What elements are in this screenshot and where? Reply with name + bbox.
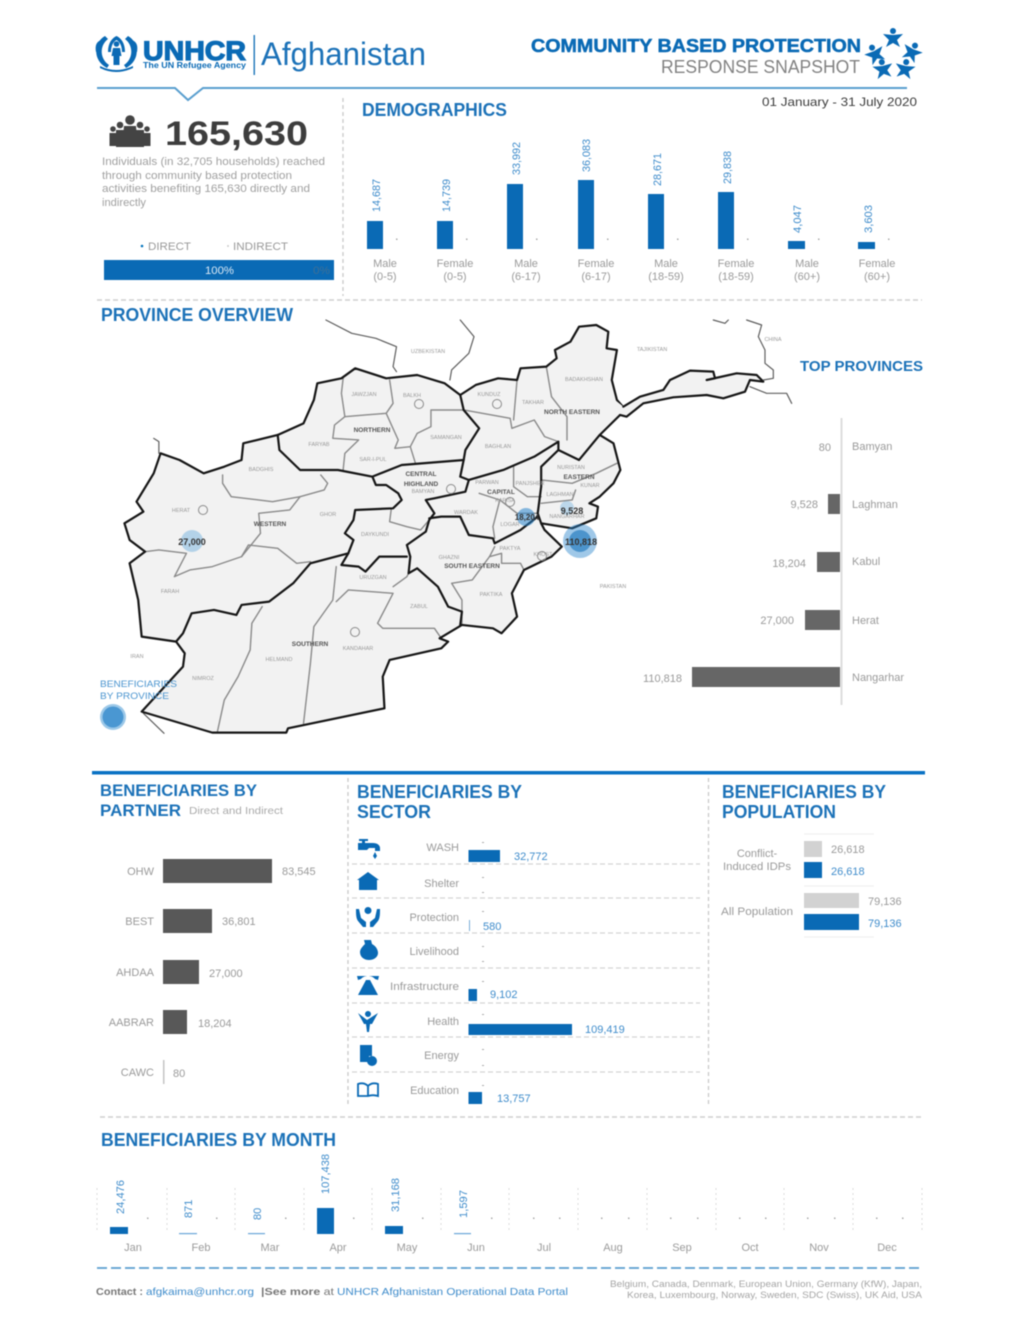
heading: PROVINCE OVERVIEW — [101, 305, 293, 325]
map labels: CAPITAL — [487, 489, 515, 496]
map labels: CHINA — [764, 337, 782, 343]
footer — [96, 1279, 923, 1301]
panel: beneficiaries by sector — [352, 782, 700, 1105]
heading: Direct and Indirect — [189, 805, 283, 817]
bar chart: 32,772 — [514, 851, 548, 863]
map labels: KANDAHAR — [343, 646, 373, 652]
bar chart: 13,757 — [497, 1093, 531, 1105]
heading: POPULATION — [722, 802, 836, 822]
bar chart: 33,992 — [511, 142, 523, 175]
icon: livelihood — [360, 940, 378, 960]
map labels: JAWZJAN — [351, 392, 377, 398]
description: Individuals (in 32,705 households) reached — [102, 156, 325, 168]
bar chart: 107,438 — [320, 1154, 332, 1194]
bar chart: 9,102 — [490, 989, 518, 1001]
bar chart: Female — [578, 258, 614, 270]
bar chart — [97, 1154, 922, 1254]
bar chart: (0-5) — [373, 271, 397, 283]
contact line: UNHCR Afghanistan Operational Data Portal — [337, 1286, 568, 1298]
map labels: BADGHIS — [249, 467, 274, 473]
bar chart: 79,136 — [868, 918, 902, 930]
bar chart: Education — [410, 1085, 459, 1097]
icon: health — [358, 1011, 378, 1032]
description: through community based protection — [102, 170, 292, 182]
bar chart: Protection — [409, 912, 459, 924]
bar chart: Jul — [537, 1242, 551, 1254]
proportional bubbles: 110,818 — [565, 537, 597, 547]
bar chart: WASH — [426, 842, 459, 854]
map labels: PAKTYA — [500, 546, 521, 552]
bar chart: Health — [427, 1016, 459, 1028]
map labels: BALKH — [403, 393, 421, 399]
map labels: ZABUL — [410, 604, 428, 610]
bar chart: 36,083 — [581, 139, 593, 172]
top provinces chart: Laghman — [852, 499, 898, 511]
map labels: PAKTIKA — [480, 592, 503, 598]
map labels: SOUTHERN — [292, 641, 329, 648]
map labels — [130, 337, 782, 682]
bar chart: 1,597 — [458, 1190, 470, 1218]
header — [96, 28, 925, 109]
progress bar: 100% — [205, 265, 234, 277]
panel: beneficiaries by partner — [100, 781, 316, 1084]
bar chart: OHW — [127, 866, 155, 878]
bar chart: 3,603 — [863, 205, 875, 233]
heading: BENEFICIARIES BY — [100, 781, 258, 800]
bar chart: 26,618 — [831, 866, 865, 878]
map labels: NURISTAN — [557, 465, 585, 471]
proportional bubbles: 9,528 — [561, 506, 583, 516]
bar chart: May — [397, 1242, 418, 1254]
map labels: LAGHMAN — [546, 492, 574, 498]
report title — [531, 36, 861, 77]
map labels: IRAN — [130, 654, 144, 660]
icon: road — [357, 976, 379, 995]
contact line: afgkaima@unhcr.org — [146, 1286, 254, 1298]
bar chart: 31,168 — [390, 1178, 402, 1212]
bar chart: 83,545 — [282, 866, 316, 878]
bar chart: Male — [795, 258, 819, 270]
title: Afghanistan — [261, 36, 426, 72]
map labels: KUNDUZ — [478, 392, 501, 398]
panel: beneficiaries by month — [97, 1130, 922, 1254]
icon: hands — [356, 907, 380, 927]
progress bar: 0% — [313, 265, 330, 277]
bar chart: Jan — [124, 1242, 142, 1254]
logo wordmark: The UN Refugee Agency — [143, 60, 246, 70]
legend: DIRECT — [148, 241, 191, 253]
map labels: PAKISTAN — [600, 584, 626, 590]
top provinces chart — [643, 358, 923, 705]
bar chart: Female — [859, 258, 895, 270]
bar chart: 580 — [483, 921, 501, 933]
logo divider — [254, 35, 255, 75]
map labels: SOUTH EASTERN — [444, 563, 500, 570]
bar chart — [390, 842, 625, 1105]
bar chart: (18-59) — [648, 271, 684, 283]
map legend: BY PROVINCE — [100, 691, 169, 702]
bar chart: BEST — [125, 916, 154, 928]
description: indirectly — [102, 197, 147, 209]
map labels: TAKHAR — [522, 400, 544, 406]
map labels: GHOR — [320, 512, 336, 518]
bar chart: Livelihood — [409, 946, 459, 958]
heading: PARTNER — [100, 801, 181, 820]
map labels: URUZGAN — [359, 575, 387, 581]
bar chart: Male — [373, 258, 397, 270]
icon: open book — [358, 1083, 378, 1096]
map labels: CENTRAL — [405, 471, 437, 478]
bar chart: 28,671 — [652, 153, 664, 186]
map labels: TAJIKISTAN — [637, 347, 667, 353]
map labels: PANJSHER — [516, 481, 544, 487]
bar chart: 109,419 — [585, 1024, 625, 1036]
heading: BENEFICIARIES BY — [357, 782, 522, 802]
divider bar — [92, 771, 925, 774]
heading: BENEFICIARIES BY MONTH — [101, 1130, 336, 1150]
map legend: BENEFICIARIES — [100, 679, 177, 690]
bar chart: CAWC — [121, 1067, 154, 1079]
logo wordmark: UNHCR — [143, 36, 246, 66]
bar chart: 79,136 — [868, 896, 902, 908]
description — [102, 156, 325, 209]
map labels: BAGHLAN — [485, 444, 511, 450]
contact line — [96, 1286, 568, 1298]
map legend — [100, 679, 177, 730]
bar chart: Mar — [261, 1242, 280, 1254]
description: activities benefiting 165,630 directly and — [102, 183, 310, 195]
proportional bubbles: 27,000 — [178, 537, 206, 547]
progress bar — [104, 260, 334, 280]
legend: INDIRECT — [233, 241, 288, 253]
heading — [722, 782, 886, 822]
legend — [141, 241, 288, 253]
bar chart: Induced IDPs — [723, 861, 792, 873]
report title: COMMUNITY BASED PROTECTION — [531, 36, 861, 56]
donors: Korea, Luxembourg, Norway, Sweden, SDC (Swiss), UK Aid, USA — [627, 1290, 923, 1301]
panel: demographics — [362, 100, 895, 283]
bar chart: 36,801 — [222, 916, 256, 928]
bar chart: 871 — [183, 1200, 195, 1218]
bar chart: Aug — [603, 1242, 623, 1254]
top provinces chart: Kabul — [852, 556, 880, 568]
bar chart: 29,838 — [722, 151, 734, 184]
map labels: SAMANGAN — [430, 435, 462, 441]
top provinces chart: Bamyan — [852, 441, 892, 453]
bar chart: (60+) — [794, 271, 820, 283]
top provinces chart: 110,818 — [643, 673, 682, 685]
bar chart: Apr — [329, 1242, 347, 1254]
bar chart: Oct — [741, 1242, 759, 1254]
bar chart: 80 — [173, 1068, 185, 1080]
bar chart: Sep — [672, 1242, 692, 1254]
bar chart: 18,204 — [198, 1018, 232, 1030]
bar chart: AABRAR — [109, 1017, 154, 1029]
map labels: FARYAB — [308, 442, 330, 448]
panel: total reached — [102, 115, 334, 280]
map labels: KAPISA — [495, 498, 515, 504]
contact line: |See more at — [261, 1286, 334, 1298]
donors: Belgium, Canada, Denmark, European Union, Germany (KfW), Japan, — [610, 1279, 922, 1290]
top provinces chart: 27,000 — [760, 615, 794, 627]
report title: RESPONSE SNAPSHOT — [661, 57, 860, 77]
bar chart: (18-59) — [718, 271, 754, 283]
map labels: EASTERN — [563, 474, 595, 481]
bar chart: Dec — [877, 1242, 897, 1254]
map labels: LOGAR — [500, 522, 520, 528]
contact line: Contact : — [96, 1286, 143, 1298]
icon: people — [110, 115, 150, 147]
heading: DEMOGRAPHICS — [362, 100, 507, 120]
bar chart: (0-5) — [443, 271, 467, 283]
heading — [100, 781, 283, 820]
bar chart: 27,000 — [209, 968, 243, 980]
bar chart: 26,618 — [831, 844, 865, 856]
bar chart: Female — [718, 258, 754, 270]
top provinces chart: Herat — [852, 615, 879, 627]
bar chart: All Population — [721, 906, 793, 918]
map labels: NORTH EASTERN — [544, 409, 600, 416]
map labels: HERAT — [172, 508, 191, 514]
bar chart: AHDAA — [116, 967, 155, 979]
map labels: BADAKHSHAN — [565, 377, 603, 383]
map labels: KUNAR — [580, 483, 600, 489]
map of Afghanistan — [124, 320, 792, 733]
panel: beneficiaries by population — [721, 782, 902, 937]
bar chart — [721, 834, 902, 937]
bar chart: Nov — [809, 1242, 829, 1254]
bar chart: Male — [514, 258, 538, 270]
map labels: NANGARHAR — [549, 514, 585, 520]
map labels: FARAH — [161, 589, 179, 595]
header rule with chevron — [97, 88, 907, 100]
city markers — [198, 400, 546, 636]
sector icons — [356, 839, 380, 1096]
bar chart: Infrastructure — [390, 981, 459, 993]
heading — [357, 782, 522, 822]
bar chart: Female — [437, 258, 473, 270]
icon: energy — [360, 1045, 377, 1066]
map labels: WARDAK — [454, 510, 478, 516]
heading: SECTOR — [357, 802, 431, 822]
top provinces chart: 9,528 — [790, 499, 818, 511]
bar chart: 14,739 — [441, 179, 453, 212]
top provinces chart: 18,204 — [772, 558, 806, 570]
map labels: HELMAND — [266, 657, 292, 663]
top provinces chart: TOP PROVINCES — [800, 358, 923, 375]
bar chart: (6-17) — [511, 271, 541, 283]
bar chart: Feb — [192, 1242, 210, 1254]
icon: water tap — [358, 839, 380, 859]
icon: five figures — [862, 28, 925, 80]
icon: UNHCR emblem — [96, 36, 137, 72]
proportional bubbles: 18,204 — [515, 513, 540, 522]
bar chart: Conflict- — [737, 848, 778, 860]
map labels: NORTHERN — [354, 427, 391, 434]
map labels: SAR-I-PUL — [359, 457, 387, 463]
donors — [610, 1279, 923, 1301]
map labels: HIGHLAND — [404, 481, 438, 488]
map labels: UZBEKISTAN — [411, 349, 445, 355]
bar chart: Energy — [424, 1050, 459, 1062]
map labels: DAYKUNDI — [361, 532, 389, 538]
bar chart: Jun — [467, 1242, 485, 1254]
map labels: NIMROZ — [192, 676, 214, 682]
bar chart — [367, 139, 895, 283]
icon: house — [357, 872, 379, 890]
bar chart — [109, 859, 316, 1084]
map labels: PARWAN — [475, 480, 499, 486]
map labels: KHOST — [534, 552, 553, 558]
bar chart: Shelter — [424, 878, 459, 890]
bar chart: 80 — [252, 1208, 264, 1220]
bar chart: 4,047 — [792, 205, 804, 233]
big number: 165,630 — [165, 115, 308, 153]
map labels: WESTERN — [254, 521, 287, 528]
bar chart: (60+) — [864, 271, 890, 283]
heading: BENEFICIARIES BY — [722, 782, 886, 802]
panel: province overview — [100, 305, 923, 733]
bar chart: 14,687 — [371, 179, 383, 212]
top provinces chart: 80 — [819, 442, 831, 454]
map labels: GHAZNI — [439, 555, 460, 561]
bar chart: Male — [654, 258, 678, 270]
proportional bubbles — [178, 501, 597, 558]
date range: 01 January - 31 July 2020 — [762, 95, 917, 109]
bar chart: 24,476 — [115, 1180, 127, 1214]
top provinces chart: Nangarhar — [852, 672, 904, 684]
bar chart: (6-17) — [581, 271, 611, 283]
map labels: BAMYAN — [412, 489, 434, 495]
